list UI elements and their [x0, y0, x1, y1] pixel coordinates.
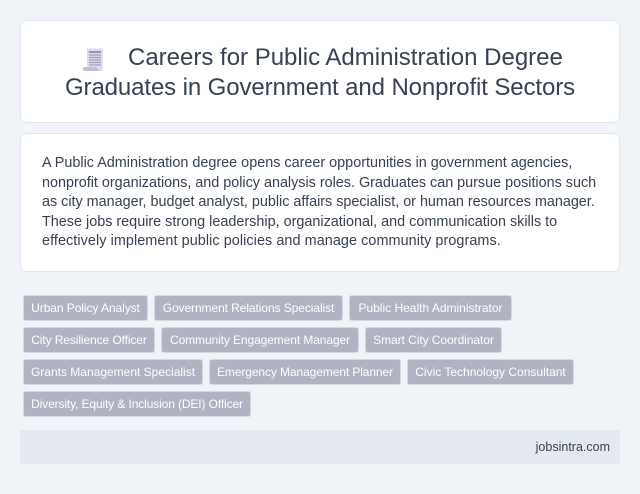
- footer bar: [20, 430, 620, 464]
- tag: [23, 295, 148, 321]
- tag: Diversity, Equity & Inclusion (DEI) Officer: [31, 397, 243, 411]
- icon: document scroll: [83, 48, 103, 71]
- tag: Government Relations Specialist: [163, 301, 334, 315]
- tag: [23, 391, 251, 417]
- panel: description: [20, 133, 620, 272]
- footer site name: jobsintra.com: [536, 440, 610, 454]
- tag group: careers: [23, 295, 574, 417]
- description line 5: effectively implement public policies and manage community programs.: [42, 233, 501, 249]
- description line 2: nonprofit organizations, and policy analysis roles. Graduates can pursue positions such: [42, 175, 596, 191]
- tag: Grants Management Specialist: [31, 365, 195, 379]
- description line 4: These jobs require strong leadership, organizational, and communication skills to: [42, 214, 557, 230]
- tag: [23, 359, 203, 385]
- description line 1: A Public Administration degree opens career opportunities in government agencies,: [42, 155, 572, 171]
- description line 3: as city manager, budget analyst, public affairs specialist, or human resources manager.: [42, 194, 595, 210]
- title line 1: Careers for Public Administration Degree: [128, 44, 563, 71]
- tag: [365, 327, 502, 353]
- tag: Community Engagement Manager: [170, 333, 350, 347]
- tag: [349, 295, 512, 321]
- tag: Smart City Coordinator: [373, 333, 494, 347]
- tag: Civic Technology Consultant: [415, 365, 566, 379]
- tag: [161, 327, 359, 353]
- panel: title card: [20, 20, 620, 123]
- tag: Emergency Management Planner: [217, 365, 393, 379]
- tag: [154, 295, 343, 321]
- tag: Urban Policy Analyst: [31, 301, 140, 315]
- tag: [209, 359, 401, 385]
- tag: [23, 327, 155, 353]
- tag: City Resilience Officer: [31, 333, 147, 347]
- tag: [407, 359, 574, 385]
- tag: Public Health Administrator: [358, 301, 503, 315]
- title line 2: Graduates in Government and Nonprofit Sectors: [65, 74, 575, 101]
